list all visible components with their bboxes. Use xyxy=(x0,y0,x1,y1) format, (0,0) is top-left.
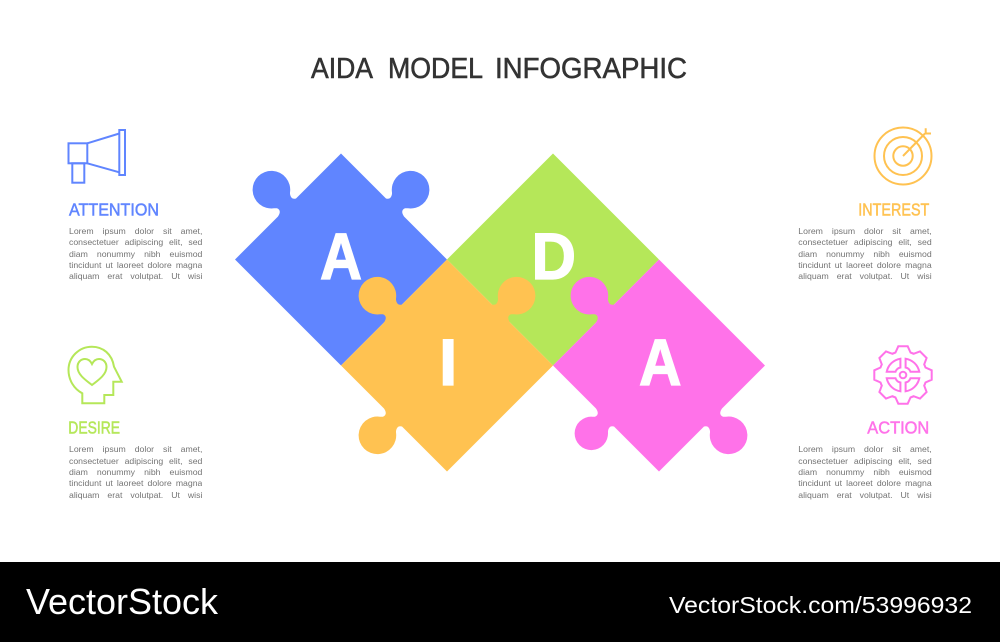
text block: interest: tincidunt ut laoreet dolore magna xyxy=(798,260,932,270)
text block: attention: consectetuer adipiscing elit, sed xyxy=(69,237,202,247)
title: AIDA xyxy=(311,53,373,85)
panel: action xyxy=(798,345,933,500)
puzzle diagram xyxy=(235,154,765,472)
text block: attention xyxy=(69,226,202,281)
text block: attention: diam nonummy nibh euismod xyxy=(69,249,202,259)
text block: interest: Lorem ipsum dolor sit amet, xyxy=(798,226,932,236)
text block: attention: Lorem ipsum dolor sit amet, xyxy=(69,226,202,236)
footer url text: VectorStock.com/53996932 xyxy=(669,592,972,618)
text block: desire: consectetuer adipiscing elit, sed xyxy=(69,456,202,466)
text block: action: aliquam erat volutpat. Ut wisi xyxy=(798,490,932,500)
text block: attention: aliquam erat volutpat. Ut wisi xyxy=(69,271,202,281)
puzzle piece: D green: D xyxy=(532,219,576,293)
title: INFOGRAPHIC xyxy=(495,53,687,85)
text block: action xyxy=(798,444,932,500)
icon: head with heart xyxy=(68,347,122,403)
puzzle piece: D green xyxy=(447,154,659,366)
icon: gear xyxy=(874,346,932,404)
icon: target with arrow xyxy=(874,128,932,184)
text block: desire: Lorem ipsum dolor sit amet, xyxy=(69,444,202,454)
title xyxy=(310,53,687,85)
text block: desire: tincidunt ut laoreet dolore magna xyxy=(69,478,202,488)
text block: interest: aliquam erat volutpat. Ut wisi xyxy=(798,271,932,281)
footer bar xyxy=(0,562,1000,642)
text block: desire: diam nonummy nibh euismod xyxy=(69,467,202,477)
panel: desire xyxy=(68,346,202,500)
heading: attention: ATTENTION xyxy=(69,200,159,220)
heading: desire: DESIRE xyxy=(68,418,120,438)
puzzle piece: A pink xyxy=(553,260,765,472)
text block: interest: consectetuer adipiscing elit, sed xyxy=(798,237,932,247)
text block: action: tincidunt ut laoreet dolore magna xyxy=(798,478,932,488)
panel: interest xyxy=(798,126,932,281)
heading: action: ACTION xyxy=(867,418,929,438)
icon: megaphone xyxy=(68,130,125,183)
footer logo text: VectorStock xyxy=(26,581,219,622)
puzzle piece: I orange xyxy=(341,260,553,472)
title: MODEL xyxy=(388,53,483,85)
puzzle piece: A blue: A xyxy=(320,219,362,293)
text block: action: consectetuer adipiscing elit, sed xyxy=(798,456,932,466)
panel: attention xyxy=(68,129,202,281)
text block: interest xyxy=(798,226,932,281)
puzzle piece: A blue xyxy=(235,154,447,366)
text block: attention: tincidunt ut laoreet dolore magna xyxy=(69,260,202,270)
text block: interest: diam nonummy nibh euismod xyxy=(798,249,932,259)
text block: action: diam nonummy nibh euismod xyxy=(798,467,932,477)
text block: desire: aliquam erat volutpat. Ut wisi xyxy=(69,490,202,500)
puzzle piece: I orange: I xyxy=(439,325,457,399)
text block: desire xyxy=(69,444,202,500)
text block: action: Lorem ipsum dolor sit amet, xyxy=(798,444,932,454)
puzzle piece: A pink: A xyxy=(639,325,682,399)
